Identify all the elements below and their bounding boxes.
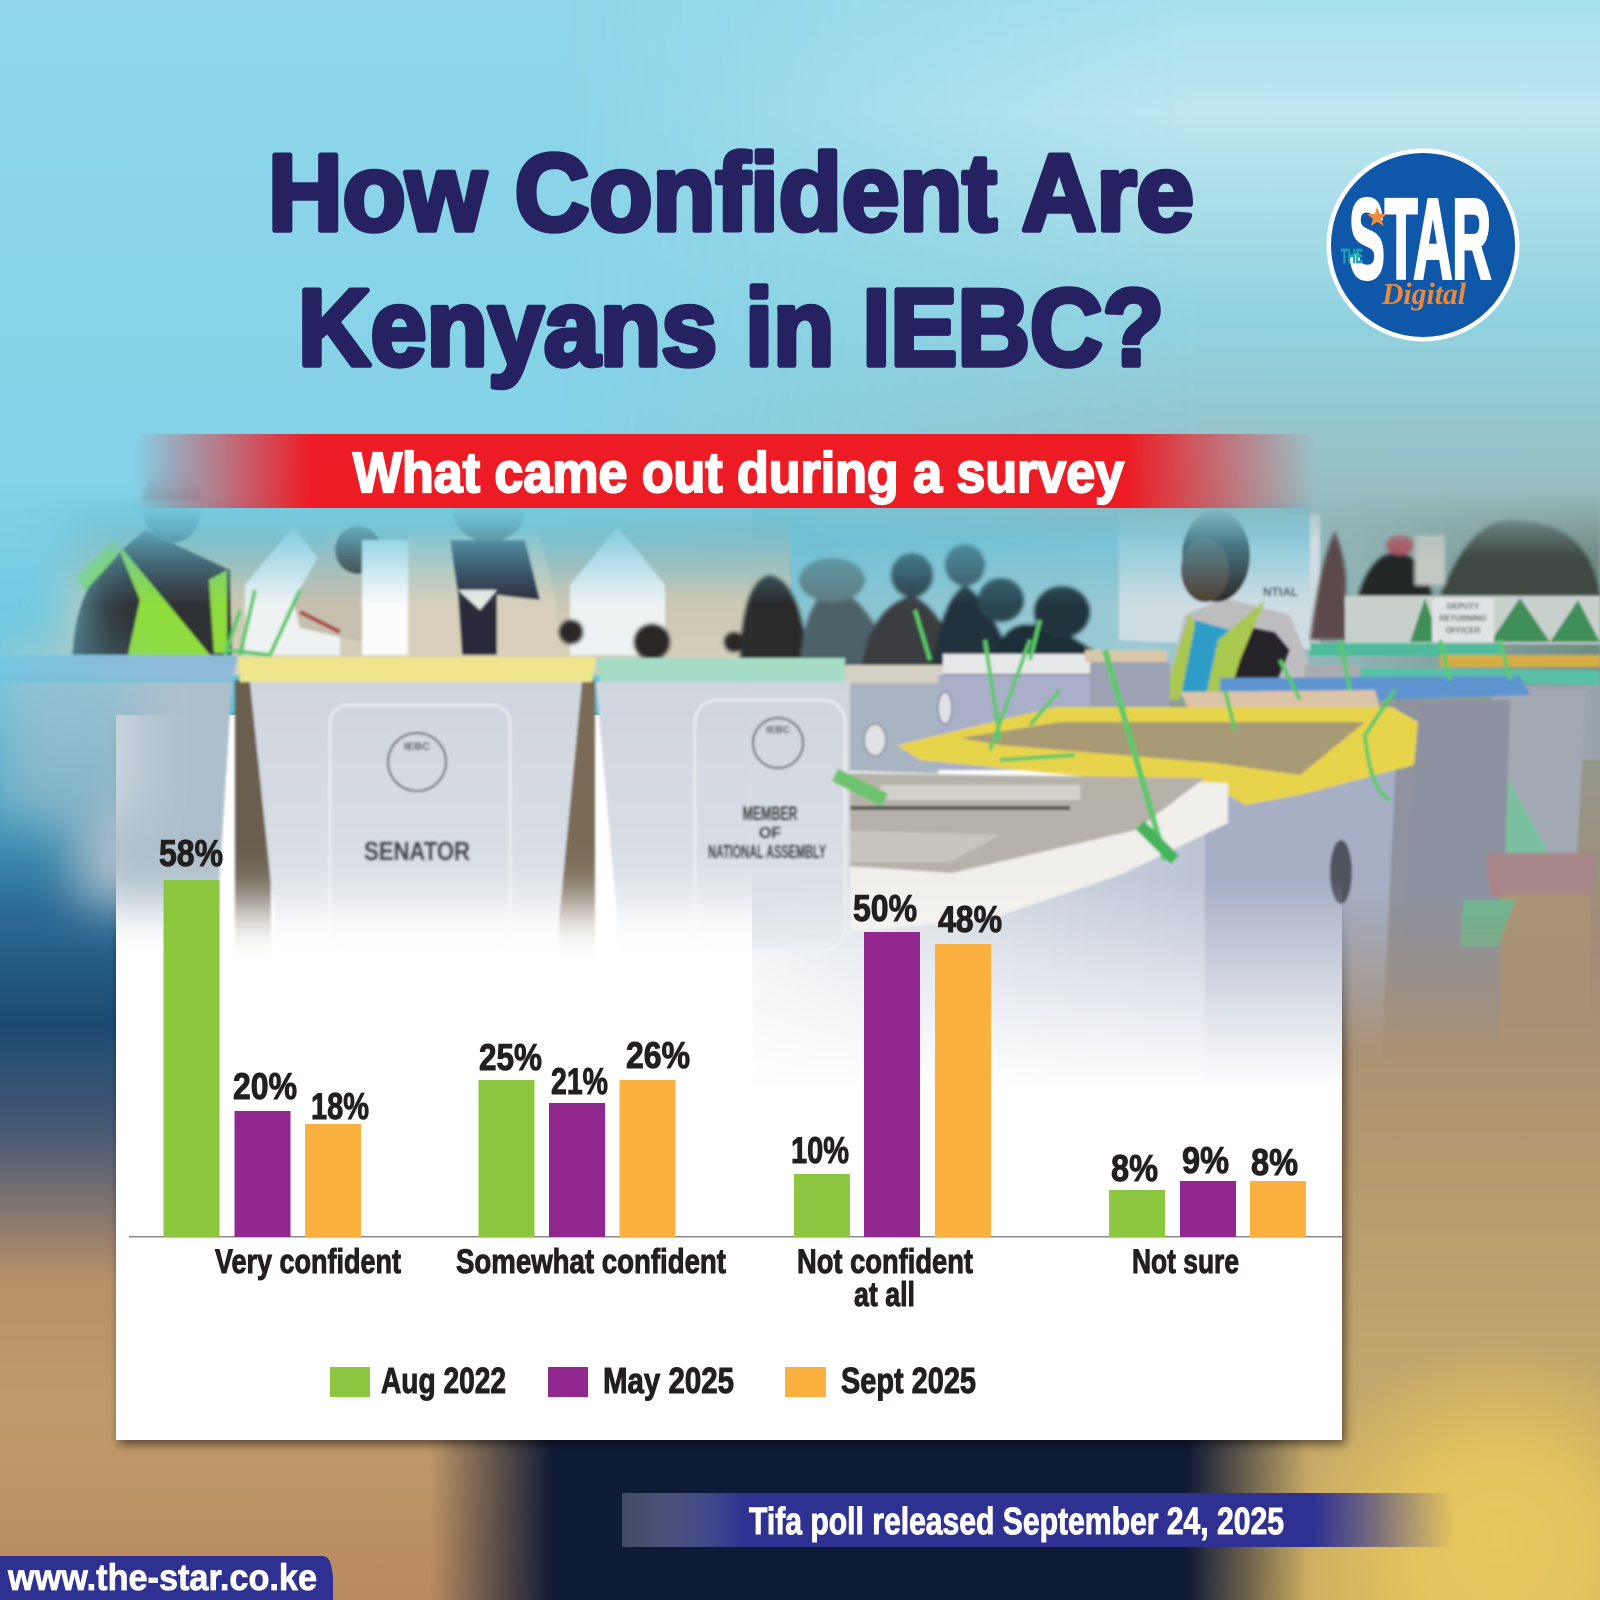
category labels: Somewhat confident [456, 1243, 726, 1281]
photo: distant boxes on right [1179, 675, 1595, 1026]
photo: officer in green vest [72, 467, 232, 655]
value labels: 26% [626, 1035, 690, 1076]
value labels: 9% [1182, 1140, 1229, 1181]
source banner [622, 1493, 1454, 1547]
photo: member of national assembly label: NATIONAL ASSEMBLY [708, 842, 826, 862]
photo: tent windows [245, 527, 665, 655]
value labels: 58% [159, 833, 223, 874]
photo: foreground grey ballot box [752, 770, 1230, 1064]
bars: Not sure [1109, 1181, 1306, 1237]
photo: table cloth and returning officer sign [1345, 596, 1600, 644]
photo: member of national assembly ballot box [596, 682, 850, 950]
photo: white box behind officer [1119, 514, 1320, 650]
bar chart [159, 833, 1306, 1314]
photo: member of national assembly ballot box: IEBC [766, 725, 790, 736]
bars: Somewhat confident [478, 1080, 676, 1237]
value labels: 8% [1111, 1148, 1158, 1189]
source banner: Tifa poll released September 24, 2025 [749, 1501, 1284, 1543]
title: Kenyans in IEBC? [298, 267, 1164, 389]
photo: table cloth and returning officer sign: RETURNING [1439, 614, 1487, 623]
photo: blue box body [0, 682, 232, 950]
photo: senator ballot box: SENATOR [364, 836, 470, 866]
photo: row of mid-ground boxes [800, 643, 1600, 780]
website tag: www.the-star.co.ke [7, 1557, 317, 1598]
photo: senator ballot box [250, 682, 582, 950]
category labels: Not sure [1132, 1243, 1239, 1281]
photo: young officer in vest: NTIAL [1263, 585, 1298, 599]
value labels: 20% [233, 1066, 297, 1107]
legend: May 2025 [603, 1360, 734, 1401]
photo: table cloth and returning officer sign: DEPUTY [1447, 602, 1480, 611]
photo: yellow-lid ballot box [897, 707, 1418, 1100]
photo: teal top wash [0, 500, 1310, 605]
logo: The Star Digital [1326, 148, 1520, 342]
value labels [159, 833, 1298, 1189]
logo: The Star Digital: Digital [1381, 276, 1466, 311]
value labels: 50% [853, 888, 917, 929]
photo: member of national assembly label: OF [759, 825, 781, 842]
title: How Confident Are [268, 132, 1194, 254]
title [268, 132, 1194, 389]
photo: table cloth and returning officer sign: OFFICER [1445, 626, 1481, 635]
photo: member of national assembly label: MEMBER [742, 804, 798, 825]
bars: Very confident [164, 880, 361, 1237]
subtitle banner: What came out during a survey [353, 441, 1124, 505]
subtitle banner [133, 434, 1316, 508]
value labels: 8% [1251, 1142, 1298, 1183]
photo: small box emblems [864, 692, 952, 756]
value labels: 48% [938, 899, 1002, 940]
category labels [215, 1243, 1239, 1314]
photo: polling station with ballot boxes [0, 467, 1600, 1100]
category labels: Not confident [797, 1243, 973, 1281]
category labels: Very confident [215, 1243, 401, 1281]
photo: foreground box lids [0, 655, 845, 682]
photo: crowd [559, 544, 1130, 680]
photo: voter casting ballot [293, 514, 558, 656]
legend [330, 1360, 976, 1401]
photo: member of national assembly label [708, 804, 826, 862]
photo: young officer in vest [1162, 510, 1312, 700]
value labels: 10% [791, 1130, 849, 1171]
legend: Aug 2022 [381, 1360, 506, 1401]
logo: The Star Digital: THE [1341, 246, 1363, 268]
value labels: 21% [551, 1061, 608, 1102]
category labels: at all [854, 1276, 915, 1314]
panel: white chart panel [116, 715, 1342, 1440]
value labels: 25% [479, 1037, 542, 1078]
value labels: 18% [311, 1086, 369, 1127]
photo: people at far right [1310, 520, 1600, 640]
bars: Not confident at all [794, 932, 991, 1237]
photo: green zip ties [225, 590, 1510, 860]
legend: Sept 2025 [841, 1360, 976, 1401]
photo: senator ballot box: IEBC [404, 741, 430, 753]
chart axis line [129, 1236, 1342, 1238]
